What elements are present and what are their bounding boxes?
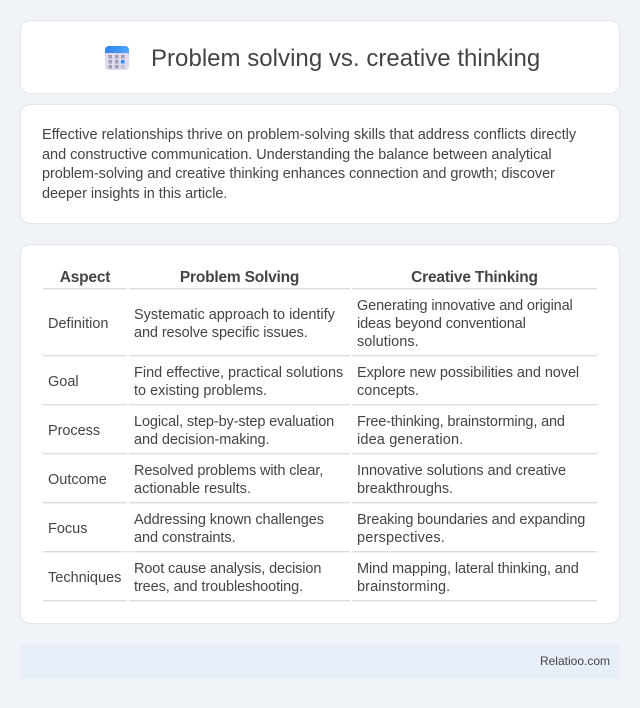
icon: calendar [105,46,129,70]
row: Focus: Focus [48,521,88,537]
title: Problem solving vs. creative thinking [151,45,540,72]
row: Process: Process [48,423,100,439]
column header: Aspect: Aspect [60,269,110,286]
intro text [42,127,576,202]
row: Techniques: brainstorming. [357,579,450,595]
row: Focus [48,512,585,546]
row: Focus: and constraints. [134,530,236,546]
row: Definition [48,298,573,350]
row: Definition: and resolve specific issues. [134,325,308,341]
row: Outcome: Resolved problems with clear, [134,463,323,479]
row: Outcome [48,463,566,497]
row: Goal: concepts. [357,383,419,399]
intro text: and constructive communication. Understanding the balance between analytical [42,146,552,162]
row: Techniques: trees, and troubleshooting. [134,579,303,595]
footer bar [20,644,620,678]
row: Definition: Systematic approach to identify [134,307,335,323]
row: Process: Logical, step-by-step evaluation [134,414,334,430]
row: Goal: Goal [48,374,79,390]
row: Goal: Explore new possibilities and novel [357,365,579,381]
row: Process: Free-thinking, brainstorming, and [357,414,565,430]
row: Outcome: actionable results. [134,481,251,497]
intro panel [20,104,620,224]
column header: Problem Solving: Problem Solving [180,269,299,286]
row: Focus: Addressing known challenges [134,512,324,528]
row: Goal [48,365,579,399]
row: Goal: Find effective, practical solutions [134,365,343,381]
row: Techniques [48,561,579,595]
column header: Creative Thinking: Creative Thinking [411,269,538,286]
intro text: problem-solving and creative thinking enhances connection and growth; discover [42,166,555,182]
row: Focus: Breaking boundaries and expanding [357,512,585,528]
row: Definition: solutions. [357,334,419,350]
header panel [20,20,620,94]
row: Techniques: Mind mapping, lateral thinking, and [357,561,579,577]
row: Definition: Definition [48,316,108,332]
row: Outcome: breakthroughs. [357,481,453,497]
footer credit: Relatioo.com [540,654,610,668]
row: Outcome: Innovative solutions and creative [357,463,566,479]
comparison table panel [20,244,620,624]
row: Focus: perspectives. [357,530,445,546]
row: Techniques: Techniques [48,570,121,586]
row: Definition: ideas beyond conventional [357,316,526,332]
row: Process: and decision-making. [134,432,269,448]
intro text: deeper insights in this article. [42,186,227,202]
row: Goal: to existing problems. [134,383,267,399]
row: Process: idea generation. [357,432,463,448]
intro text: Effective relationships thrive on problem-solving skills that address conflicts directly [42,127,576,143]
row: Outcome: Outcome [48,472,107,488]
row: Techniques: Root cause analysis, decision [134,561,321,577]
row: Definition: Generating innovative and original [357,298,573,314]
row: Process [48,414,565,448]
